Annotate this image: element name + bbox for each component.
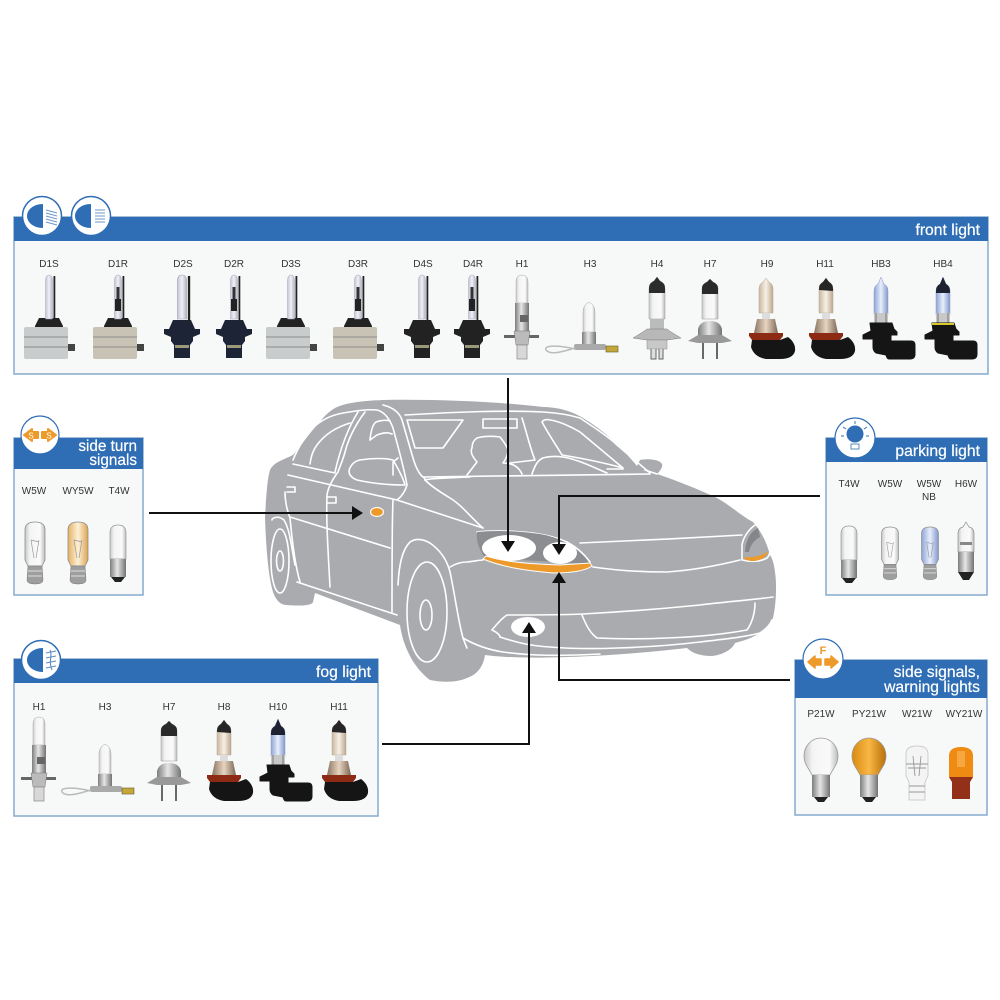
header bar xyxy=(14,438,143,469)
bulb labels: D3R xyxy=(348,259,368,270)
bulb: H1 xyxy=(504,275,539,359)
bulb labels: NB xyxy=(922,492,936,503)
bulb labels: H7 xyxy=(704,259,717,270)
panel: fog light xyxy=(14,640,378,816)
bulb labels: H4 xyxy=(651,259,664,270)
heading: front light xyxy=(915,222,981,239)
car body silhouette xyxy=(265,400,776,682)
arrow: fog light xyxy=(382,622,536,744)
bulb: P21W xyxy=(804,738,838,802)
bulb: H4 xyxy=(633,277,681,359)
bulb labels: H1 xyxy=(516,259,529,270)
bulb labels: HB3 xyxy=(871,259,891,270)
heading: side turn xyxy=(78,438,137,455)
bulb labels: WY5W xyxy=(62,486,94,497)
bulb labels: H10 xyxy=(269,702,288,713)
bulb labels: T4W xyxy=(838,479,860,490)
header bar xyxy=(826,438,987,462)
header bar xyxy=(14,659,378,683)
bulb labels xyxy=(39,259,953,270)
icon: side turn arrows xyxy=(21,416,59,454)
bulb: W21W xyxy=(906,746,928,800)
arrow: parking light xyxy=(552,496,820,555)
bulb labels: T4W xyxy=(108,486,130,497)
bulb: PY21W xyxy=(852,738,886,802)
arrow: side signals xyxy=(552,572,790,680)
bulb labels: D1R xyxy=(108,259,128,270)
bulb labels: P21W xyxy=(807,709,835,720)
bulb labels xyxy=(22,486,130,497)
bulb: H8 xyxy=(207,720,253,801)
icon: side signal arrows xyxy=(803,639,843,679)
header bar xyxy=(14,217,988,241)
bulb: W5W xyxy=(25,522,45,584)
bulb labels: W5W xyxy=(917,479,942,490)
bulb: H11 xyxy=(809,278,855,359)
bulb labels: H8 xyxy=(218,702,231,713)
bulb: D2S xyxy=(164,275,200,358)
bulb labels: H9 xyxy=(761,259,774,270)
bulb labels: H11 xyxy=(330,702,348,713)
bulb: D3S xyxy=(266,275,317,359)
icon: fog light xyxy=(22,640,60,680)
bulb labels: H3 xyxy=(584,259,597,270)
bulb: WY5W xyxy=(68,522,88,584)
heading second line: signals xyxy=(89,452,137,469)
icon: side turn arrows: S xyxy=(46,432,52,440)
bulb: W5W xyxy=(882,527,898,580)
bulb: T4W xyxy=(110,525,126,582)
panel: front light xyxy=(14,196,988,374)
icon: low beam xyxy=(72,196,110,236)
panel: side signals, warning lights xyxy=(795,639,987,815)
bulb: H1 xyxy=(21,717,56,801)
car illustration xyxy=(265,400,776,682)
bulb labels: W21W xyxy=(902,709,933,720)
bulb: D4S xyxy=(404,275,440,358)
bulb: D2R xyxy=(216,275,252,358)
header bar xyxy=(795,660,987,698)
icon: side turn arrows: S xyxy=(28,432,34,440)
bulb: H3 xyxy=(546,302,618,353)
bulb labels: D4R xyxy=(463,259,483,270)
bulb labels xyxy=(807,709,983,720)
arrow: side turn signals xyxy=(149,506,363,520)
heading second line: warning lights xyxy=(883,679,980,696)
bulb: D4R xyxy=(454,275,490,358)
bulb: H7 xyxy=(147,721,191,801)
car outline details xyxy=(271,405,773,662)
icon: high beam xyxy=(22,196,62,236)
bulb labels: HB4 xyxy=(933,259,953,270)
panel: parking light xyxy=(826,418,987,595)
right headlight xyxy=(744,528,768,561)
bulb: HB4 xyxy=(925,277,977,359)
bulb labels: H11 xyxy=(816,259,834,270)
bulb: D1R xyxy=(93,275,144,359)
bulb: D1S xyxy=(24,275,75,359)
bulb: HB3 xyxy=(863,277,915,359)
bulb labels: H7 xyxy=(163,702,176,713)
icon: parking light xyxy=(835,418,875,458)
bulb: H7 xyxy=(688,279,732,359)
heading: side signals, xyxy=(894,664,980,681)
bulb: WY21W xyxy=(949,747,973,799)
panel: side turn signals xyxy=(14,416,143,595)
bulb labels: D3S xyxy=(281,259,301,270)
bulb labels: W5W xyxy=(22,486,47,497)
bulb: W5W NB xyxy=(922,527,938,580)
bulb labels: D2R xyxy=(224,259,244,270)
bulb: H9 xyxy=(749,278,795,359)
bulb labels: WY21W xyxy=(946,709,983,720)
bulb labels: D2S xyxy=(173,259,193,270)
heading: fog light xyxy=(316,664,372,681)
bulb: D3R xyxy=(333,275,384,359)
bulb: H11 xyxy=(322,720,368,801)
bulb: H10 xyxy=(260,719,312,801)
left headlight xyxy=(477,531,592,573)
bulb labels: H6W xyxy=(955,479,978,490)
bulb: H6W xyxy=(958,522,974,580)
bulb: T4W xyxy=(841,526,857,583)
bulb: H3 xyxy=(62,744,134,795)
bulb labels: W5W xyxy=(878,479,903,490)
bulb labels: H1 xyxy=(33,702,46,713)
bulb labels: PY21W xyxy=(852,709,887,720)
arrow: front light xyxy=(501,378,515,552)
bulb labels xyxy=(838,479,978,503)
bulb labels: D4S xyxy=(413,259,433,270)
bulb labels: H3 xyxy=(99,702,112,713)
heading: parking light xyxy=(895,443,981,460)
icon: side signal arrows: F xyxy=(820,645,827,657)
side marker light xyxy=(370,508,384,516)
fog light xyxy=(511,617,545,637)
bulb labels: D1S xyxy=(39,259,59,270)
bulb labels xyxy=(33,702,348,713)
